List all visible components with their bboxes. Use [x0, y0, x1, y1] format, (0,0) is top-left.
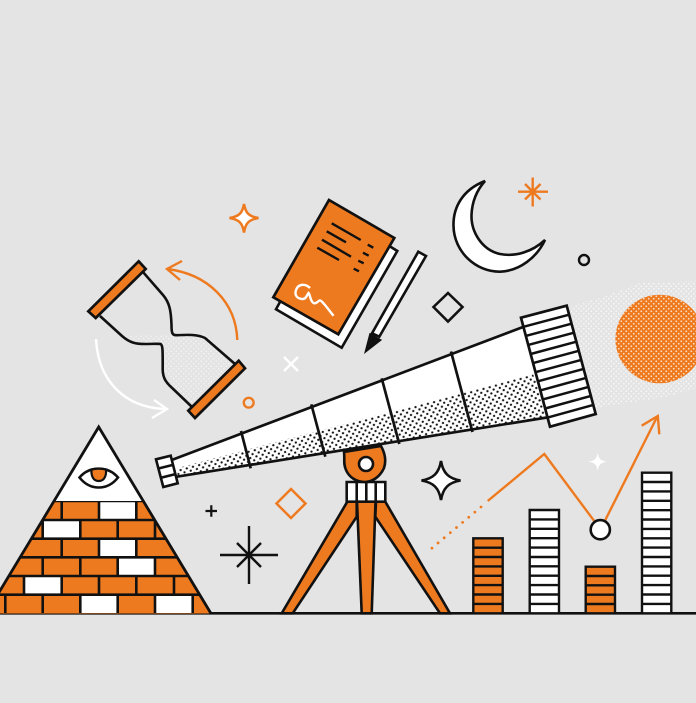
book back page [276, 246, 397, 348]
icon: black sparkle [422, 461, 460, 500]
bar 4 [642, 473, 671, 613]
bar 2 [530, 510, 559, 613]
pivot [344, 446, 385, 482]
bar 3 ribs [586, 576, 615, 604]
arrow: white curved [96, 339, 167, 418]
trend dotted start [432, 507, 481, 548]
pencil [365, 252, 426, 352]
lens ring [521, 306, 596, 427]
tube [172, 327, 550, 477]
eyepiece [156, 456, 178, 487]
icon: orange asterisk [518, 178, 548, 206]
pyramid bricks [0, 501, 211, 614]
bar chart [473, 473, 671, 613]
right leg [375, 502, 450, 613]
bar 4 ribs [642, 482, 671, 604]
pencil tip [365, 334, 381, 352]
icon: white cross [284, 357, 298, 371]
icon: black diamond [434, 293, 462, 322]
collar [347, 482, 385, 502]
book text lines [317, 223, 373, 271]
tube shading [177, 374, 549, 477]
bar 3 [586, 567, 615, 613]
arrow: orange curved [167, 261, 237, 340]
icon: black plus [206, 505, 217, 517]
icon: eye [80, 469, 118, 488]
hourglass glass outline [100, 272, 235, 407]
icon: white sparkle [588, 452, 607, 471]
icon: orange sparkle [230, 204, 258, 232]
pyramid outline [0, 427, 211, 614]
pyramid [0, 427, 211, 614]
centre leg [357, 502, 376, 613]
tube outline [172, 327, 550, 477]
tube segments [241, 352, 472, 468]
light beam [570, 281, 696, 408]
pyramid capstone [54, 427, 144, 501]
bar 1 [473, 538, 503, 613]
book cover [273, 200, 394, 334]
bar 1 ribs [473, 548, 503, 604]
hourglass top cap [88, 261, 146, 318]
icon: orange diamond [276, 489, 306, 518]
pencil body [372, 252, 426, 337]
icon: black asterisk [220, 526, 278, 584]
icon: black ring [579, 255, 589, 265]
telescope mount [282, 446, 450, 613]
telescope [156, 306, 596, 487]
icon: orange ring [244, 398, 254, 408]
trend arrowhead [642, 416, 659, 434]
trend line [488, 416, 657, 521]
trend line arrow [432, 416, 659, 548]
hourglass sand [125, 332, 235, 407]
sun [615, 295, 696, 383]
moon [453, 181, 545, 272]
hourglass bottom cap [188, 361, 245, 418]
ground line [0, 612, 696, 615]
lens ring ribs [523, 315, 593, 418]
bar 2 ribs [530, 519, 559, 604]
book signature [295, 285, 334, 316]
pivot hole [359, 457, 373, 471]
trend marker [591, 520, 610, 539]
left leg [282, 502, 357, 613]
hourglass [88, 261, 245, 418]
book [273, 200, 397, 348]
